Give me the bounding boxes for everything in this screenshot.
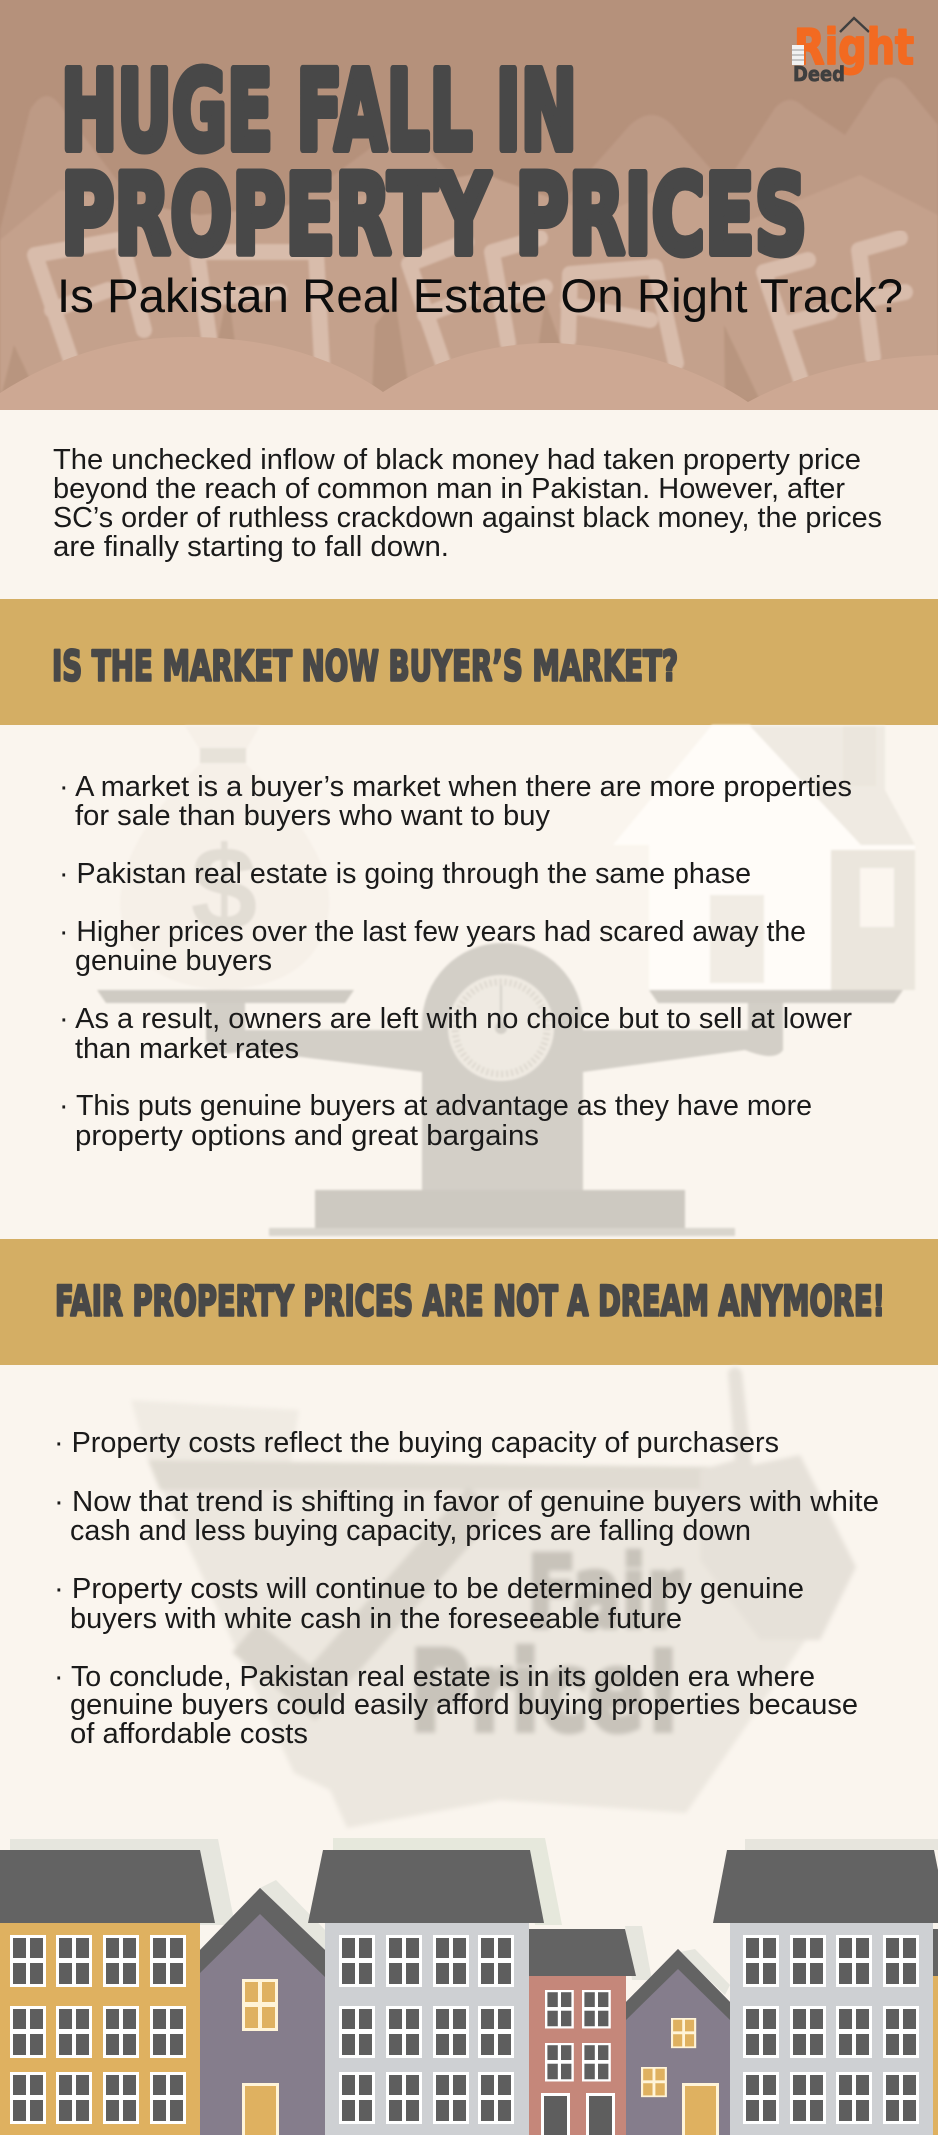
bullet list: fair prices: · To conclude, Pakistan real estate is in its golden era where — [54, 1661, 815, 1693]
panel: header banner — [0, 0, 938, 410]
illustration: fair price paper in hand — [131, 1367, 856, 1828]
bullet list: buyer's market: · Pakistan real estate is going through the same phase — [59, 858, 751, 890]
building shadows — [10, 1838, 938, 1995]
building: red townhouse — [529, 1929, 636, 2135]
illustration: balance scale with money bag and house — [97, 725, 915, 1236]
band: section heading 1 — [0, 599, 938, 725]
logo roof icon — [840, 18, 869, 32]
logo wordmark Deed: Deed — [793, 62, 845, 86]
paper label Fair: Fair — [527, 1534, 682, 1651]
bullet list: fair prices: · Property costs will continue to be determined by genuine — [54, 1573, 804, 1605]
intro text: SC’s order of ruthless crackdown against black money, the prices — [53, 502, 882, 534]
thumb and hand — [700, 1367, 856, 1640]
building: small purple house — [626, 1949, 730, 2135]
logo: Right Deed — [792, 18, 914, 86]
header letter shapes — [35, 238, 905, 380]
building: yellow apartment block — [0, 1850, 215, 2135]
bullet list: fair prices: genuine buyers could easily afford buying properties because — [70, 1689, 858, 1721]
intro text: are finally starting to fall down. — [53, 531, 449, 563]
band: section heading 2 — [0, 1239, 938, 1365]
building: purple house — [200, 1888, 325, 2135]
check mark — [245, 1500, 483, 1693]
bullet list: buyer's market: · As a result, owners are left with no choice but to sell at lower — [59, 1003, 852, 1035]
paper label Price: Price! — [410, 1628, 682, 1756]
bullet list: fair prices: · Property costs reflect the buying capacity of purchasers — [54, 1427, 779, 1459]
logo tower icon — [792, 45, 804, 65]
subtitle: Is Pakistan Real Estate On Right Track? — [57, 269, 903, 322]
title: HUGE FALL IN — [61, 47, 577, 175]
scale base — [315, 1190, 685, 1236]
bullet list: buyer's market: · Higher prices over the last few years had scared away the — [59, 916, 806, 948]
intro text: The unchecked inflow of black money had taken property price — [53, 444, 861, 476]
bullet list: fair prices: · Now that trend is shifting in favor of genuine buyers with white — [54, 1486, 879, 1518]
bullet list: fair prices: of affordable costs — [70, 1718, 308, 1750]
building: grey apartment block — [308, 1850, 544, 2135]
bullet list: buyer's market: · This puts genuine buyers at advantage as they have more — [59, 1090, 812, 1122]
scale pans — [97, 990, 903, 1003]
house — [613, 725, 915, 990]
building: right edge sliver — [933, 1929, 938, 2135]
paper — [131, 1400, 299, 1467]
bullet list: fair prices: cash and less buying capacity, prices are falling down — [70, 1515, 751, 1547]
bullet list: fair prices: buyers with white cash in the foreseeable future — [70, 1603, 682, 1635]
scale beam and body — [206, 943, 783, 1193]
intro text — [53, 444, 882, 563]
illustration: row of buildings — [0, 1838, 938, 2135]
logo wordmark Right: Right — [794, 19, 914, 76]
intro text: beyond the reach of common man in Pakistan. However, after — [53, 473, 845, 505]
bullet list: buyer's market: genuine buyers — [75, 945, 272, 977]
money bag: $ — [191, 822, 257, 956]
money bag — [120, 726, 329, 990]
bullet list: buyer's market: property options and great bargains — [75, 1120, 539, 1152]
bullet list: fair prices — [54, 1427, 879, 1750]
scale dial — [448, 975, 554, 1081]
bullet list: buyer's market: · A market is a buyer’s market when there are more properties — [59, 771, 852, 803]
building: right grey apartment block — [713, 1850, 938, 2135]
bullet list: buyer's market: than market rates — [75, 1033, 299, 1065]
bullet list: buyer's market — [59, 771, 852, 1152]
bullet list: buyer's market: for sale than buyers who want to buy — [75, 800, 551, 832]
header foreground hills — [0, 337, 938, 410]
header mountains — [0, 78, 938, 400]
